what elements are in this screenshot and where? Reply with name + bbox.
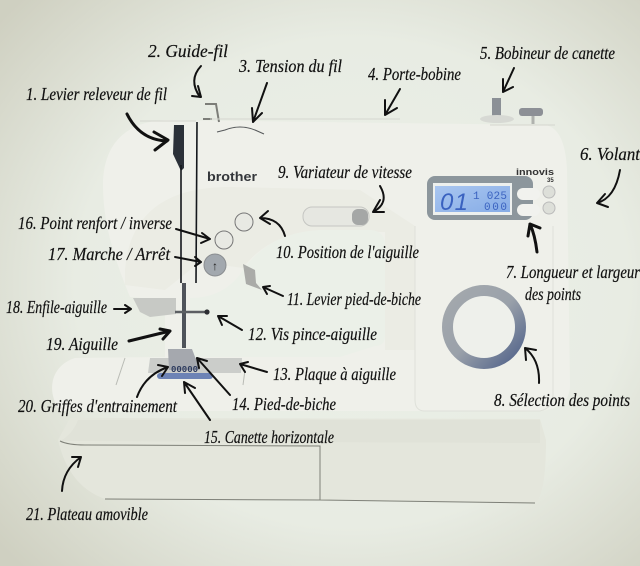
arrow 15 (184, 382, 210, 420)
top edge (140, 119, 555, 125)
tray (58, 418, 546, 503)
start stop button (204, 254, 226, 276)
thread lever slot (173, 125, 184, 171)
brand: innovis: innovis (516, 167, 554, 177)
arrow 1 (127, 114, 168, 150)
thread guide (203, 104, 219, 122)
label 14: 14. Pied-de-biche (232, 394, 336, 414)
arrow 18 (114, 305, 131, 313)
arrow 14 (197, 358, 230, 395)
label 11: 11. Levier pied-de-biche (287, 289, 421, 309)
tray seam and edges (60, 441, 535, 503)
label 10: 10. Position de l'aiguille (276, 242, 419, 262)
label 5: 5. Bobineur de canette (480, 43, 615, 63)
stitch selection dial (448, 290, 520, 364)
presser foot lever (243, 264, 262, 290)
label 16: 16. Point renfort / inverse (18, 213, 172, 233)
machine body (52, 120, 570, 411)
label 21: 21. Plateau amovible (26, 504, 148, 524)
label 4: 4. Porte-bobine (368, 64, 461, 84)
label 13: 13. Plaque à aiguille (273, 364, 396, 384)
label 19: 19. Aiguille (46, 334, 118, 354)
arrow 11 (263, 286, 283, 296)
bobbin winder (492, 98, 501, 120)
arrow 6 (597, 170, 620, 207)
sewing machine illustration (52, 98, 570, 503)
arrow 7 (528, 224, 540, 252)
throat opening (190, 230, 385, 357)
arrow 2 (192, 66, 201, 97)
arrow 19 (129, 329, 170, 341)
label 18: 18. Enfile-aiguille (6, 297, 107, 317)
speed slider (303, 207, 369, 226)
needle bar (182, 283, 186, 348)
arrow 16 (176, 229, 210, 243)
needle threader (133, 298, 176, 317)
label 2: 2. Guide-fil (148, 41, 228, 61)
arrow 13 (240, 362, 267, 372)
lcd buttons (517, 188, 540, 200)
tension dial marks (217, 127, 264, 134)
label 9: 9. Variateur de vitesse (278, 162, 412, 182)
arrow 21 (62, 457, 81, 491)
lcd digits: 01 (440, 189, 468, 216)
arrow 9 (373, 186, 384, 212)
lcd panel (427, 176, 533, 220)
plate guide lines (116, 358, 245, 385)
needle position button (235, 213, 253, 231)
presser foot (168, 349, 200, 370)
label 12: 12. Vis pince-aiguille (248, 324, 377, 344)
arrow 3 (252, 83, 267, 122)
arrow 4 (385, 89, 400, 115)
arrow 5 (503, 68, 514, 92)
label 20: 20. Griffes d'entrainement (18, 396, 178, 416)
arrow 10 (260, 211, 285, 236)
arm shading (125, 187, 415, 350)
label 15: 15. Canette horizontale (204, 427, 334, 447)
arrow 17 (175, 257, 201, 266)
bobbin cover (157, 373, 213, 379)
right panel outline (415, 226, 553, 411)
sewing machine illustration: 35 (547, 178, 554, 184)
label 17: 17. Marche / Arrêt (48, 244, 171, 264)
label 1: 1. Levier releveur de fil (26, 84, 167, 104)
sewing machine illustration: 1 025 (473, 191, 507, 203)
bed front face (60, 420, 540, 443)
arrow 12 (218, 316, 242, 330)
reinforcement button (215, 231, 233, 249)
arrow 20 (137, 365, 168, 397)
brand: brother: brother (207, 169, 257, 184)
sewing machine illustration: 000 (484, 202, 507, 214)
feed dogs: 00000 (171, 365, 198, 375)
sewing machine illustration: ↑ (212, 259, 218, 273)
arrow 8 (525, 348, 539, 383)
needle plate (148, 358, 242, 373)
label 3: 3. Tension du fil (238, 56, 342, 76)
text: des points (525, 284, 581, 304)
